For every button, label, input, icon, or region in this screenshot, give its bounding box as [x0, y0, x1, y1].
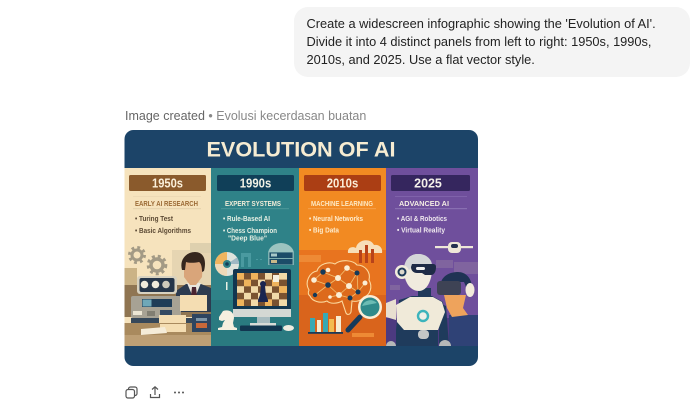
bullet list: • Neural Networks [309, 214, 363, 223]
year label 1950s [129, 175, 206, 191]
year label 2025 [391, 175, 470, 191]
bullet list: • AGI & Robotics [397, 214, 447, 223]
bullet list: • Virtual Reality [397, 226, 446, 234]
year label 2010s: 2010s [327, 176, 358, 190]
heading: machine learning: MACHINE LEARNING [311, 199, 373, 208]
bullet list: • Rule-Based AI [223, 214, 270, 223]
icon: copy [126, 387, 137, 398]
icon: chess knight [218, 310, 237, 330]
illustration: person in VR headset [437, 272, 474, 317]
icon: magnifying glass [348, 295, 382, 330]
year label 1990s: 1990s [240, 176, 271, 190]
user prompt bubble [294, 7, 690, 77]
prompt text: 2010s, and 2025. Use a flat vector style. [306, 52, 535, 67]
year label 1990s [217, 175, 294, 191]
bullet list [397, 214, 447, 234]
prompt text: Divide it into 4 distinct panels from left to right: 1950s, 1990s, [306, 34, 652, 49]
heading: expert systems: EXPERT SYSTEMS [225, 199, 281, 208]
panel: 1990s [211, 168, 299, 346]
icon: compact disc [215, 252, 239, 276]
illustration: computer machine [131, 276, 211, 332]
illustration: robot [386, 254, 451, 346]
year label 2010s [304, 175, 381, 191]
icon: arch and dashes [226, 253, 262, 290]
bullet list [223, 214, 277, 242]
bar chart [308, 313, 343, 334]
year label 1950s: 1950s [152, 176, 183, 190]
illustration: punched paper [141, 295, 207, 335]
heading: advanced AI: ADVANCED AI [399, 199, 449, 208]
bullet list: • Turing Test [135, 214, 173, 223]
panel: 1950s [124, 168, 211, 346]
prompt text [306, 16, 656, 67]
panel: 2025 [386, 168, 478, 346]
year label 2025: 2025 [414, 176, 442, 190]
panel: 2010s [299, 168, 386, 346]
icon: drone [435, 242, 473, 253]
bullet list: • Big Data [309, 226, 340, 234]
bullet list [135, 214, 191, 235]
illustration: neural brain [307, 261, 371, 314]
icon: share [150, 387, 160, 398]
icon: more [174, 392, 184, 394]
heading: early AI research: EARLY AI RESEARCH [135, 199, 198, 208]
illustration: chess monitor [233, 269, 294, 331]
bullet list: • Basic Algorithms [135, 226, 191, 235]
icon: gears [130, 248, 166, 274]
bullet list: • Chess Champion [223, 226, 277, 235]
prompt text: Create a widescreen infographic showing the 'Evolution of AI'. [306, 16, 656, 31]
image caption: Image created • Evolusi kecerdasan buatan [125, 109, 366, 123]
title: EVOLUTION OF AI [206, 138, 396, 162]
action icons [125, 386, 184, 399]
1950s scene backdrop [124, 243, 211, 346]
infographic image [124, 130, 478, 366]
header and footer band [124, 130, 479, 366]
icon: server globe [268, 243, 294, 265]
illustration: scientist [176, 252, 211, 312]
bullet list: "Deep Blue" [228, 234, 267, 242]
bullet list [309, 214, 363, 234]
icon: cloud and bars [348, 240, 382, 263]
